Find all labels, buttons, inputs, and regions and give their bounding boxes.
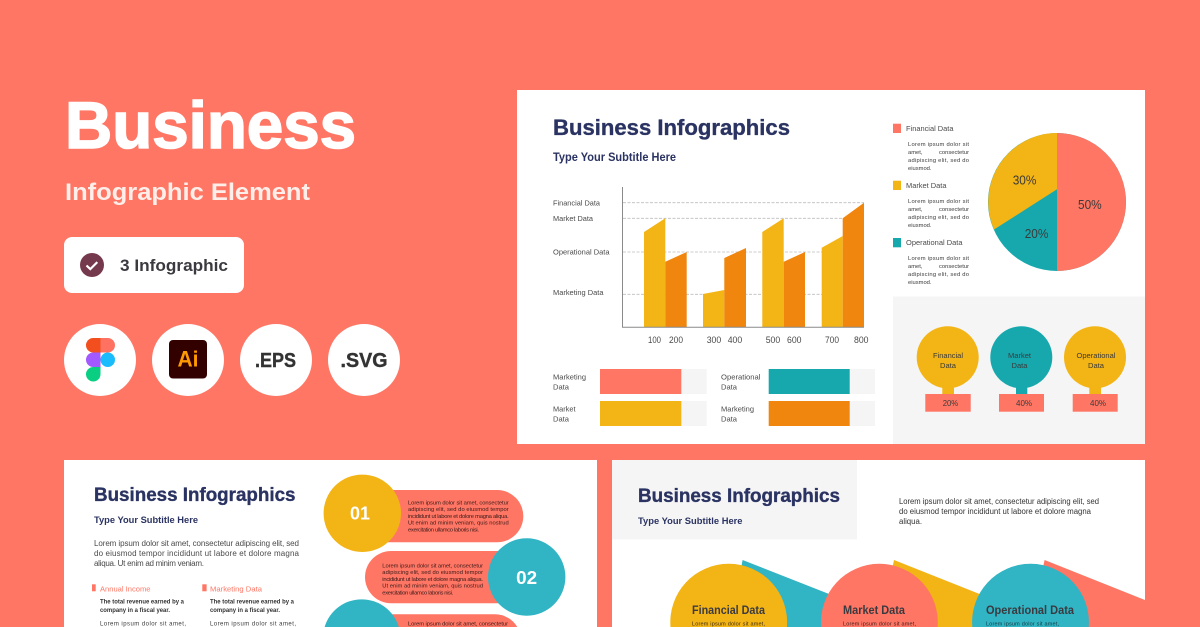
heading: Business Infographics bbox=[553, 115, 790, 140]
description paragraph: do eiusmod tempor incididunt ut labore et dolore magna bbox=[899, 507, 1092, 516]
chart: skewed columns: 600 bbox=[787, 335, 802, 345]
legend: operational data: adipiscing elit, sed do bbox=[908, 272, 969, 278]
ribbon: coral bbox=[1030, 560, 1145, 627]
step 02: Ut enim ad minim veniam, quis nostrud bbox=[382, 584, 483, 590]
stat: market data bbox=[990, 326, 1052, 412]
description paragraph: aliqua. bbox=[899, 517, 922, 526]
circle: market data bbox=[821, 564, 938, 627]
icon: EPS format: .EPS bbox=[255, 350, 296, 372]
legend: market data: consectetur bbox=[939, 207, 969, 213]
chart: skewed columns: Operational Data bbox=[553, 248, 610, 256]
step 02: adipiscing elit, sed do eiusmod tempor bbox=[382, 570, 483, 576]
panel: bar and pie infographic bbox=[517, 90, 1145, 444]
legend: financial data: eiusmod. bbox=[908, 166, 932, 172]
circle: market data: Market Data bbox=[843, 605, 906, 617]
step 02: 02 bbox=[516, 568, 537, 588]
chart: pie bbox=[988, 133, 1126, 271]
legend: financial data: adipiscing elit, sed do bbox=[908, 158, 969, 164]
stat: market data: 40% bbox=[1016, 399, 1032, 408]
chart: pie: 20% bbox=[1025, 227, 1048, 241]
icon: Adobe Illustrator bbox=[152, 324, 224, 396]
note: annual income: Annual Income bbox=[100, 585, 150, 594]
heading: Business Infographics bbox=[94, 485, 296, 506]
step 01: 01 bbox=[350, 504, 370, 524]
panel: three circles infographic bbox=[612, 460, 1145, 627]
note: marketing data bbox=[202, 584, 296, 627]
legend: financial data: consectetur bbox=[939, 150, 969, 156]
step 02: incididunt ut labore et dolore magna aliqua. bbox=[382, 577, 483, 583]
chart: skewed columns: 200 bbox=[669, 335, 683, 345]
stat: financial data: Data bbox=[940, 363, 956, 370]
stat: operational data: Operational bbox=[1076, 353, 1116, 360]
chart: skewed columns: Marketing Data bbox=[553, 288, 604, 297]
legend: operational data bbox=[893, 238, 969, 286]
chart: skewed columns: 700 bbox=[825, 335, 839, 345]
description paragraph: Lorem ipsum dolor sit amet, consectetur adipiscing elit, sed bbox=[899, 497, 1099, 506]
legend: operational data: Operational Data bbox=[906, 238, 963, 247]
chart: horizontal progress bars: Marketing bbox=[553, 372, 586, 382]
chart: horizontal progress bars: Operational bbox=[721, 372, 761, 382]
legend: financial data: Financial Data bbox=[906, 124, 954, 133]
stat: operational data bbox=[1064, 326, 1126, 412]
circle: operational data bbox=[972, 564, 1089, 627]
chart: skewed columns: 800 bbox=[854, 335, 868, 345]
chart: horizontal progress bars: Market bbox=[553, 404, 576, 414]
legend: market data: adipiscing elit, sed do bbox=[908, 215, 969, 221]
panel: lollipop stats bbox=[893, 296, 1145, 444]
chart: skewed columns: Financial Data bbox=[553, 198, 601, 208]
legend: operational data: consectetur bbox=[939, 264, 969, 270]
note: annual income: The total revenue earned by a bbox=[100, 598, 184, 606]
chart: skewed columns: 100 bbox=[648, 335, 661, 345]
header block: Type Your Subtitle Here bbox=[638, 516, 742, 527]
chart: horizontal progress bars: Data bbox=[721, 382, 738, 392]
step 01: exercitation ullamco laboris nisi. bbox=[408, 527, 479, 533]
icon: SVG format: .SVG bbox=[340, 350, 388, 372]
intro paragraph: do eiusmod tempor incididunt ut labore et dolore magna bbox=[94, 549, 300, 558]
step 03 bbox=[325, 599, 517, 627]
note: annual income: company in a fiscal year. bbox=[100, 607, 170, 614]
intro paragraph: Lorem ipsum dolor sit amet, consectetur adipiscing elit, sed bbox=[94, 539, 299, 548]
circle: financial data bbox=[670, 564, 787, 627]
stat: operational data: 40% bbox=[1090, 399, 1106, 408]
step 01: incididunt ut labore et dolore magna aliqua. bbox=[408, 514, 509, 520]
step 02 bbox=[365, 538, 565, 616]
icon: Figma bbox=[64, 324, 136, 396]
stat: financial data: 20% bbox=[943, 399, 958, 408]
stat: financial data bbox=[917, 326, 979, 412]
legend: market data: Market Data bbox=[906, 181, 947, 190]
intro paragraph: aliqua. Ut enim ad minim veniam. bbox=[94, 559, 204, 568]
legend: operational data: eiusmod. bbox=[908, 280, 932, 286]
header block bbox=[612, 460, 857, 540]
note: marketing data: The total revenue earned by a bbox=[210, 598, 294, 606]
header block: Business Infographics bbox=[638, 486, 840, 507]
legend: operational data: Lorem ipsum dolor sit bbox=[908, 256, 969, 262]
chart: skewed columns: Market Data bbox=[553, 214, 594, 223]
stat: financial data: Financial bbox=[933, 353, 963, 360]
chart: horizontal progress bars: Data bbox=[721, 414, 738, 424]
icon: Adobe Illustrator: Ai bbox=[178, 346, 198, 372]
subheading: Type Your Subtitle Here bbox=[553, 152, 676, 164]
legend: financial data: amet, bbox=[908, 150, 923, 156]
circle: operational data: Operational Data bbox=[986, 605, 1075, 617]
icon: check mark bbox=[80, 253, 104, 277]
badge: 3 Infographic: 3 Infographic bbox=[120, 256, 228, 275]
subheading: Type Your Subtitle Here bbox=[94, 515, 198, 526]
intro paragraph bbox=[94, 539, 300, 568]
step 01: Lorem ipsum dolor sit amet, consectetur bbox=[408, 500, 509, 506]
description paragraph bbox=[899, 497, 1099, 526]
panel: numbered steps infographic bbox=[64, 460, 597, 627]
stat: market data: Data bbox=[1012, 363, 1028, 370]
step 01 bbox=[324, 475, 523, 552]
stat: market data: Market bbox=[1008, 353, 1031, 360]
chart: horizontal progress bars bbox=[553, 369, 875, 426]
title: Business: Business bbox=[65, 88, 356, 162]
stat: operational data: Data bbox=[1088, 363, 1104, 370]
chart: horizontal progress bars: Marketing bbox=[721, 404, 754, 414]
legend: market data: eiusmod. bbox=[908, 223, 932, 229]
icon: EPS format bbox=[240, 324, 312, 396]
chart: horizontal progress bars: Data bbox=[553, 382, 570, 392]
chart: pie: 50% bbox=[1078, 198, 1102, 212]
badge: 3 Infographic bbox=[64, 237, 244, 293]
ribbon: yellow bbox=[880, 560, 1050, 627]
legend: market data: Lorem ipsum dolor sit bbox=[908, 199, 969, 205]
step 02: Lorem ipsum dolor sit amet, consectetur bbox=[382, 564, 483, 570]
legend: market data bbox=[893, 181, 969, 229]
step 01: adipiscing elit, sed do eiusmod tempor bbox=[408, 507, 509, 513]
legend: operational data: amet, bbox=[908, 264, 923, 270]
legend: financial data bbox=[893, 124, 969, 172]
chart: skewed columns: 400 bbox=[728, 335, 742, 345]
note: annual income bbox=[92, 584, 186, 627]
chart: skewed columns: 300 bbox=[707, 335, 721, 345]
step 02: exercitation ullamco laboris nisi. bbox=[382, 590, 454, 596]
chart: skewed columns: 500 bbox=[766, 335, 780, 345]
icon: SVG format bbox=[328, 324, 400, 396]
circle: financial data: Financial Data bbox=[692, 605, 766, 617]
chart: pie: 30% bbox=[1013, 174, 1036, 188]
ribbon: teal bbox=[730, 560, 900, 627]
chart: horizontal progress bars: Data bbox=[553, 414, 570, 424]
subtitle: Infographic Element: Infographic Element bbox=[65, 179, 310, 206]
note: marketing data: company in a fiscal year. bbox=[210, 607, 280, 614]
legend: market data: amet, bbox=[908, 207, 923, 213]
chart: skewed columns bbox=[553, 187, 868, 345]
note: marketing data: Marketing Data bbox=[210, 585, 263, 594]
step 01: Ut enim ad minim veniam, quis nostrud bbox=[408, 521, 509, 527]
legend: financial data: Lorem ipsum dolor sit bbox=[908, 142, 969, 148]
